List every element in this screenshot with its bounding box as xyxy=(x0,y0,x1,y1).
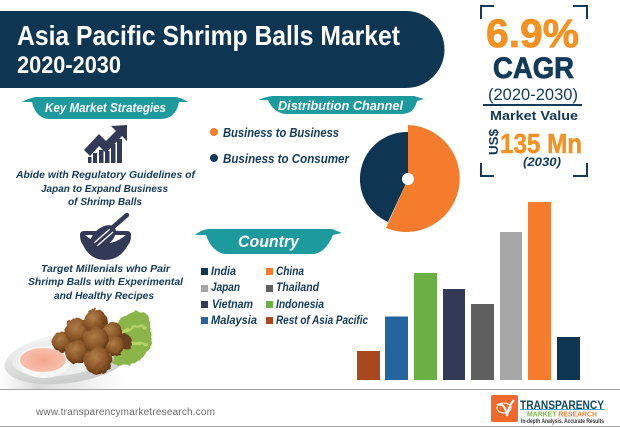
country legend: Rest of Asia Pacific xyxy=(276,313,368,327)
subtitle: years: 2020-2030 xyxy=(17,52,121,79)
logo xyxy=(491,395,605,425)
country legend: Japan xyxy=(211,280,240,294)
panel: key stats xyxy=(481,6,587,176)
country legend: Indonesia xyxy=(276,297,324,311)
bar chart xyxy=(357,202,580,380)
panel: key market strategies xyxy=(15,97,196,302)
strategy text: millennials: Shrimp Balls with Experimental xyxy=(28,276,184,288)
stat: market value label: Market Value xyxy=(490,108,578,123)
ribbon heading: distribution channel: Distribution Channel xyxy=(278,98,403,113)
country legend: China xyxy=(276,264,304,278)
pie chart xyxy=(360,125,460,232)
logo tagline: In-depth Analysis. Accurate Results xyxy=(521,419,605,425)
strategy text: regulatory guidelines: Abide with Regulatory Guidelines of xyxy=(15,169,196,181)
ribbon heading: key market strategies xyxy=(22,97,188,119)
country legend: Vietnam xyxy=(212,297,253,311)
panel: country xyxy=(195,202,580,380)
icon: growth chart xyxy=(84,125,127,163)
ribbon heading: country: Country xyxy=(238,232,300,251)
ribbon heading: country xyxy=(195,229,342,254)
country legend: Thailand xyxy=(276,280,320,294)
strategy text: millennials: and Healthy Recipes xyxy=(54,290,154,302)
logo subname: MARKET RESEARCH xyxy=(527,412,597,418)
country legend xyxy=(201,264,368,327)
strategy text: regulatory guidelines: of Shrimp Balls xyxy=(68,196,142,208)
country legend: Malaysia xyxy=(211,313,257,327)
divider line xyxy=(483,104,582,106)
footer url: www.transparencymarketresearch.com xyxy=(35,407,215,418)
ribbon heading: distribution channel xyxy=(258,96,424,114)
ribbon heading: key market strategies: Key Market Strategies xyxy=(45,100,166,115)
strategy text: millennials xyxy=(28,263,184,302)
logo name: TRANSPARENCY xyxy=(520,398,604,412)
strategy text: regulatory guidelines xyxy=(15,169,196,208)
stat: CAGR label: CAGR xyxy=(493,52,574,85)
stat: market value: 135 Mn xyxy=(500,128,582,159)
panel: distribution channel xyxy=(210,96,460,232)
legend: business to consumer: Business to Consumer xyxy=(223,152,350,166)
stat: CAGR period: (2020-2030) xyxy=(488,85,578,104)
title: Asia Pacific Shrimp Balls Market xyxy=(17,20,400,51)
stat: CAGR percent: 6.9% xyxy=(486,12,579,56)
logo mark xyxy=(491,395,518,422)
strategy text: regulatory guidelines: Japan to Expand Business xyxy=(41,183,168,195)
stat: year: (2030) xyxy=(523,157,561,169)
food photo: shrimp balls on plate with sauce xyxy=(0,309,151,392)
stat: currency: US$ xyxy=(486,128,501,155)
title banner xyxy=(0,11,445,88)
strategy text: millennials: Target Millenials who Pair xyxy=(41,263,171,275)
country legend: India xyxy=(211,264,236,278)
icon: whisk and bowl xyxy=(80,215,131,260)
footer xyxy=(0,389,620,427)
stat frame brackets xyxy=(481,6,587,176)
legend: business to business: Business to Business xyxy=(223,126,339,140)
